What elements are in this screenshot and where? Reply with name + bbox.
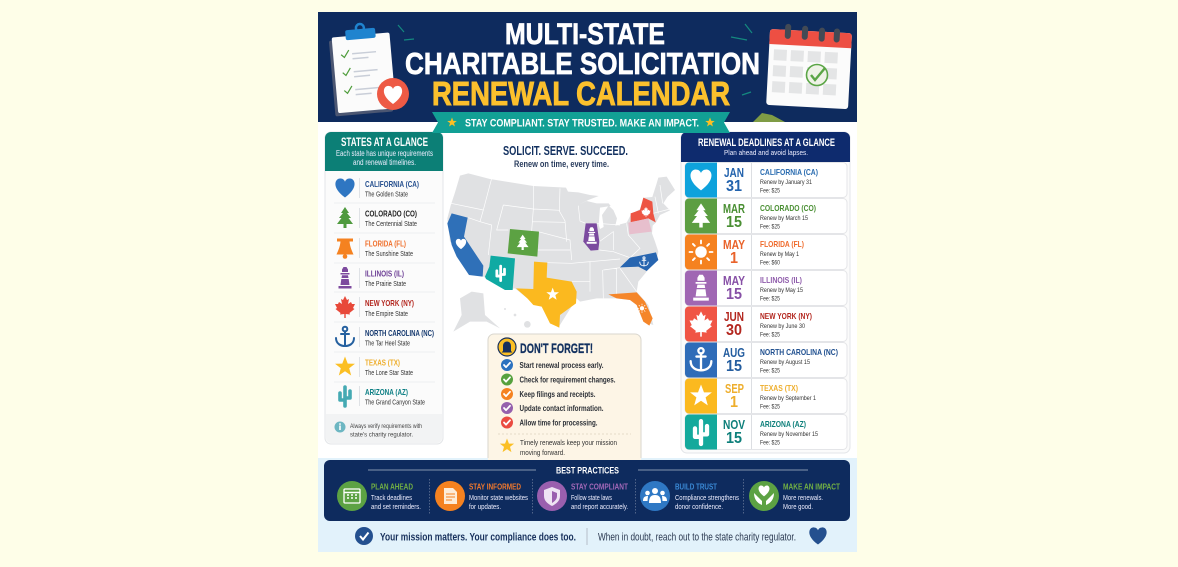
state row: Arizona: The Grand Canyon State: [365, 400, 425, 406]
checklist item: [501, 374, 616, 386]
practice: build trust: BUILD TRUST: [675, 482, 718, 492]
icon: clipboard with heart: [328, 21, 409, 116]
practice: build trust: donor confidence.: [675, 504, 723, 511]
practice: stay informed: [435, 481, 528, 511]
deadline card: Texas: TEXAS (TX): [760, 383, 798, 393]
deadline card: Colorado: COLORADO (CO): [760, 203, 816, 213]
panel heading: RENEWAL DEADLINES AT A GLANCE: [698, 137, 835, 149]
state row: Illinois: The Prairie State: [365, 281, 406, 288]
deadline card: California: Renew by January 31: [760, 179, 812, 186]
deadline card: Arizona: Fee: $25: [760, 440, 780, 446]
icon: bell: [498, 338, 516, 356]
sparkle accents: [398, 24, 752, 95]
footer message: When in doubt, reach out to the state charity regulator.: [598, 532, 796, 544]
practice: stay compliant: [537, 481, 629, 511]
highlighted state: Texas: [516, 262, 577, 328]
practice: stay compliant: Follow state laws: [571, 495, 612, 502]
centre heading: [503, 144, 628, 169]
checklist item: Check for requirement changes.: [520, 374, 616, 384]
state row: North Carolina: The Tar Heel State: [365, 340, 410, 348]
header banner: [318, 12, 857, 122]
highlighted state: Florida: [608, 292, 653, 326]
map of the United States: [447, 173, 675, 332]
centre heading: SOLICIT. SERVE. SUCCEED.: [503, 144, 628, 158]
highlighted state: North Carolina: [620, 252, 658, 271]
deadline card: California: Fee: $25: [760, 188, 780, 194]
practice: plan ahead: [337, 481, 421, 511]
state row: New York: NEW YORK (NY): [365, 298, 414, 308]
panel: best practices: BEST PRACTICES: [556, 466, 619, 476]
verify note: state's charity regulator.: [350, 432, 413, 438]
deadline card: Illinois: Fee: $25: [760, 296, 780, 302]
state row: Florida: FLORIDA (FL): [365, 238, 406, 248]
deadline card: Arizona: NOV: [723, 417, 745, 432]
checklist item: Update contact information.: [520, 403, 604, 413]
state row: Arizona: ARIZONA (AZ): [365, 387, 408, 397]
deadline card: Illinois: MAY: [723, 273, 745, 288]
practice: build trust: [640, 481, 739, 511]
footer background: [318, 458, 857, 552]
deadline card: New York: Renew by June 30: [760, 323, 805, 330]
deadline card: Arizona: ARIZONA (AZ): [760, 419, 806, 429]
practice: build trust: Compliance strengthens: [675, 495, 739, 502]
deadline card: Texas: 1: [730, 394, 738, 411]
practice: make an impact: More renewals.: [783, 495, 823, 502]
deadline card: North Carolina: 15: [726, 358, 742, 375]
deadline card: New York: Fee: $25: [760, 332, 780, 338]
panel heading: [681, 132, 850, 162]
state row: Florida: [336, 238, 413, 259]
deadline card: Texas: Fee: $25: [760, 404, 780, 410]
deadline card: Colorado: MAR: [723, 201, 745, 216]
deadline card: Arizona: 15: [726, 430, 742, 447]
deadline card: Arizona: Renew by November 15: [760, 431, 818, 438]
state row: California: [335, 178, 419, 198]
checklist item: [501, 402, 604, 414]
deadline card: Florida: MAY: [723, 237, 745, 252]
decorative globe sliver: [753, 113, 785, 122]
highlighted state: Colorado: [508, 229, 539, 257]
state row: North Carolina: NORTH CAROLINA (NC): [365, 328, 434, 338]
deadline card: Florida: [685, 234, 847, 270]
state row: North Carolina: [336, 327, 434, 348]
checklist item: Keep filings and receipts.: [520, 389, 596, 399]
deadline card: California: JAN: [724, 165, 744, 180]
practice: stay informed: for updates.: [469, 504, 501, 511]
ribbon tagline: [432, 112, 730, 133]
verify note: Always verify requirements with: [350, 423, 422, 430]
deadline card: Florida: FLORIDA (FL): [760, 239, 804, 249]
panel heading: STATES AT A GLANCE: [341, 135, 428, 149]
state row: Arizona: [340, 387, 425, 406]
practice: plan ahead: and set reminders.: [371, 504, 421, 511]
deadline card: Texas: Renew by September 1: [760, 395, 816, 402]
reminder note: moving forward.: [520, 448, 565, 457]
panel heading: [325, 132, 443, 171]
footer message: [355, 527, 827, 545]
deadline card: California: [685, 162, 847, 198]
deadline card: Arizona: [685, 414, 847, 450]
deadline card: Florida: 1: [730, 250, 738, 267]
title: RENEWAL CALENDAR: [432, 75, 730, 112]
deadline card: Illinois: 15: [726, 286, 742, 303]
panel: best practices: [324, 460, 850, 521]
deadline card: Colorado: Renew by March 15: [760, 215, 808, 222]
checklist item: [501, 359, 604, 371]
title: [405, 18, 760, 112]
deadline card: Illinois: ILLINOIS (IL): [760, 275, 802, 285]
deadline card: Texas: [685, 378, 847, 414]
checklist item: Allow time for processing.: [520, 418, 598, 428]
icon: calendar with check: [766, 23, 852, 109]
practice: stay compliant: and report accurately.: [571, 504, 628, 511]
state row: Texas: TEXAS (TX): [365, 358, 400, 368]
state row: Texas: [335, 356, 413, 377]
deadline card: Colorado: 15: [726, 214, 742, 231]
practice: make an impact: [749, 481, 841, 511]
deadline card: North Carolina: [685, 342, 847, 378]
practice: make an impact: MAKE AN IMPACT: [783, 482, 841, 492]
deadline card: North Carolina: Fee: $25: [760, 368, 780, 374]
state row: New York: [335, 296, 414, 318]
state row: New York: The Empire State: [365, 311, 408, 318]
highlighted state: Arizona: [485, 256, 515, 290]
highlighted state: New York: [631, 198, 656, 222]
icon: check badge: [355, 527, 373, 545]
highlighted state: Illinois: [583, 223, 599, 251]
centre heading: Renew on time, every time.: [514, 159, 609, 169]
deadline card: Illinois: [685, 270, 847, 306]
ribbon tagline: STAY COMPLIANT. STAY TRUSTED. MAKE AN IMPACT.: [465, 118, 699, 130]
state row: Texas: The Lone Star State: [365, 370, 413, 377]
deadline card: California: 31: [726, 178, 742, 195]
title: CHARITABLE SOLICITATION: [405, 46, 760, 81]
state row: Illinois: [338, 267, 406, 288]
base map: [447, 173, 675, 328]
highlighted state: Pennsylvania: [628, 218, 652, 234]
panel heading: and renewal timelines.: [353, 158, 416, 167]
state row: California: CALIFORNIA (CA): [365, 179, 419, 189]
practice: plan ahead: Track deadlines: [371, 495, 412, 502]
deadline card: Colorado: [685, 198, 847, 234]
state row: Colorado: The Centennial State: [365, 221, 417, 228]
panel heading: Each state has unique requirements: [336, 149, 433, 158]
deadline card: North Carolina: Renew by August 15: [760, 359, 810, 366]
checklist item: Start renewal process early.: [520, 360, 604, 370]
deadline card: New York: JUN: [724, 309, 744, 324]
practice: stay compliant: STAY COMPLIANT: [571, 482, 629, 492]
panel: states at a glance: [325, 132, 443, 444]
checklist item: [501, 388, 596, 400]
practice: stay informed: STAY INFORMED: [469, 482, 521, 492]
verify note: [326, 414, 442, 443]
state row: Illinois: ILLINOIS (IL): [365, 268, 404, 278]
deadline card: Colorado: Fee: $25: [760, 224, 780, 230]
state row: California: The Golden State: [365, 192, 408, 198]
deadline card: New York: [685, 306, 847, 342]
checklist item: [501, 416, 598, 428]
icon: heart: [809, 527, 827, 545]
sheet background: [318, 12, 857, 552]
state row: Colorado: COLORADO (CO): [365, 208, 417, 218]
reminder note: Timely renewals keep your mission: [520, 438, 617, 447]
deadline card: Florida: Renew by May 1: [760, 251, 799, 258]
panel: renewal deadlines: [681, 132, 850, 453]
deadline card: California: CALIFORNIA (CA): [760, 167, 818, 177]
deadline card: Illinois: Renew by May 15: [760, 287, 803, 294]
state row: Florida: The Sunshine State: [365, 251, 413, 258]
practice: make an impact: More good.: [783, 504, 813, 511]
panel: don't forget: [488, 334, 641, 464]
panel heading: Plan ahead and avoid lapses.: [724, 148, 808, 157]
deadline card: North Carolina: NORTH CAROLINA (NC): [760, 347, 838, 357]
highlighted state: California: [447, 213, 483, 277]
deadline card: North Carolina: AUG: [723, 345, 745, 360]
deadline card: New York: 30: [726, 322, 742, 339]
footer message: Your mission matters. Your compliance does too.: [380, 532, 576, 544]
practice: stay informed: Monitor state websites: [469, 495, 528, 502]
deadline card: Florida: Fee: $60: [760, 260, 780, 266]
deadline card: New York: NEW YORK (NY): [760, 311, 812, 321]
title: MULTI-STATE: [505, 18, 665, 51]
practice: plan ahead: PLAN AHEAD: [371, 482, 413, 492]
panel: don't forget: DON'T FORGET!: [520, 340, 593, 356]
state row: Colorado: [337, 207, 417, 228]
deadline card: Texas: SEP: [725, 381, 744, 396]
reminder note: [500, 438, 617, 457]
